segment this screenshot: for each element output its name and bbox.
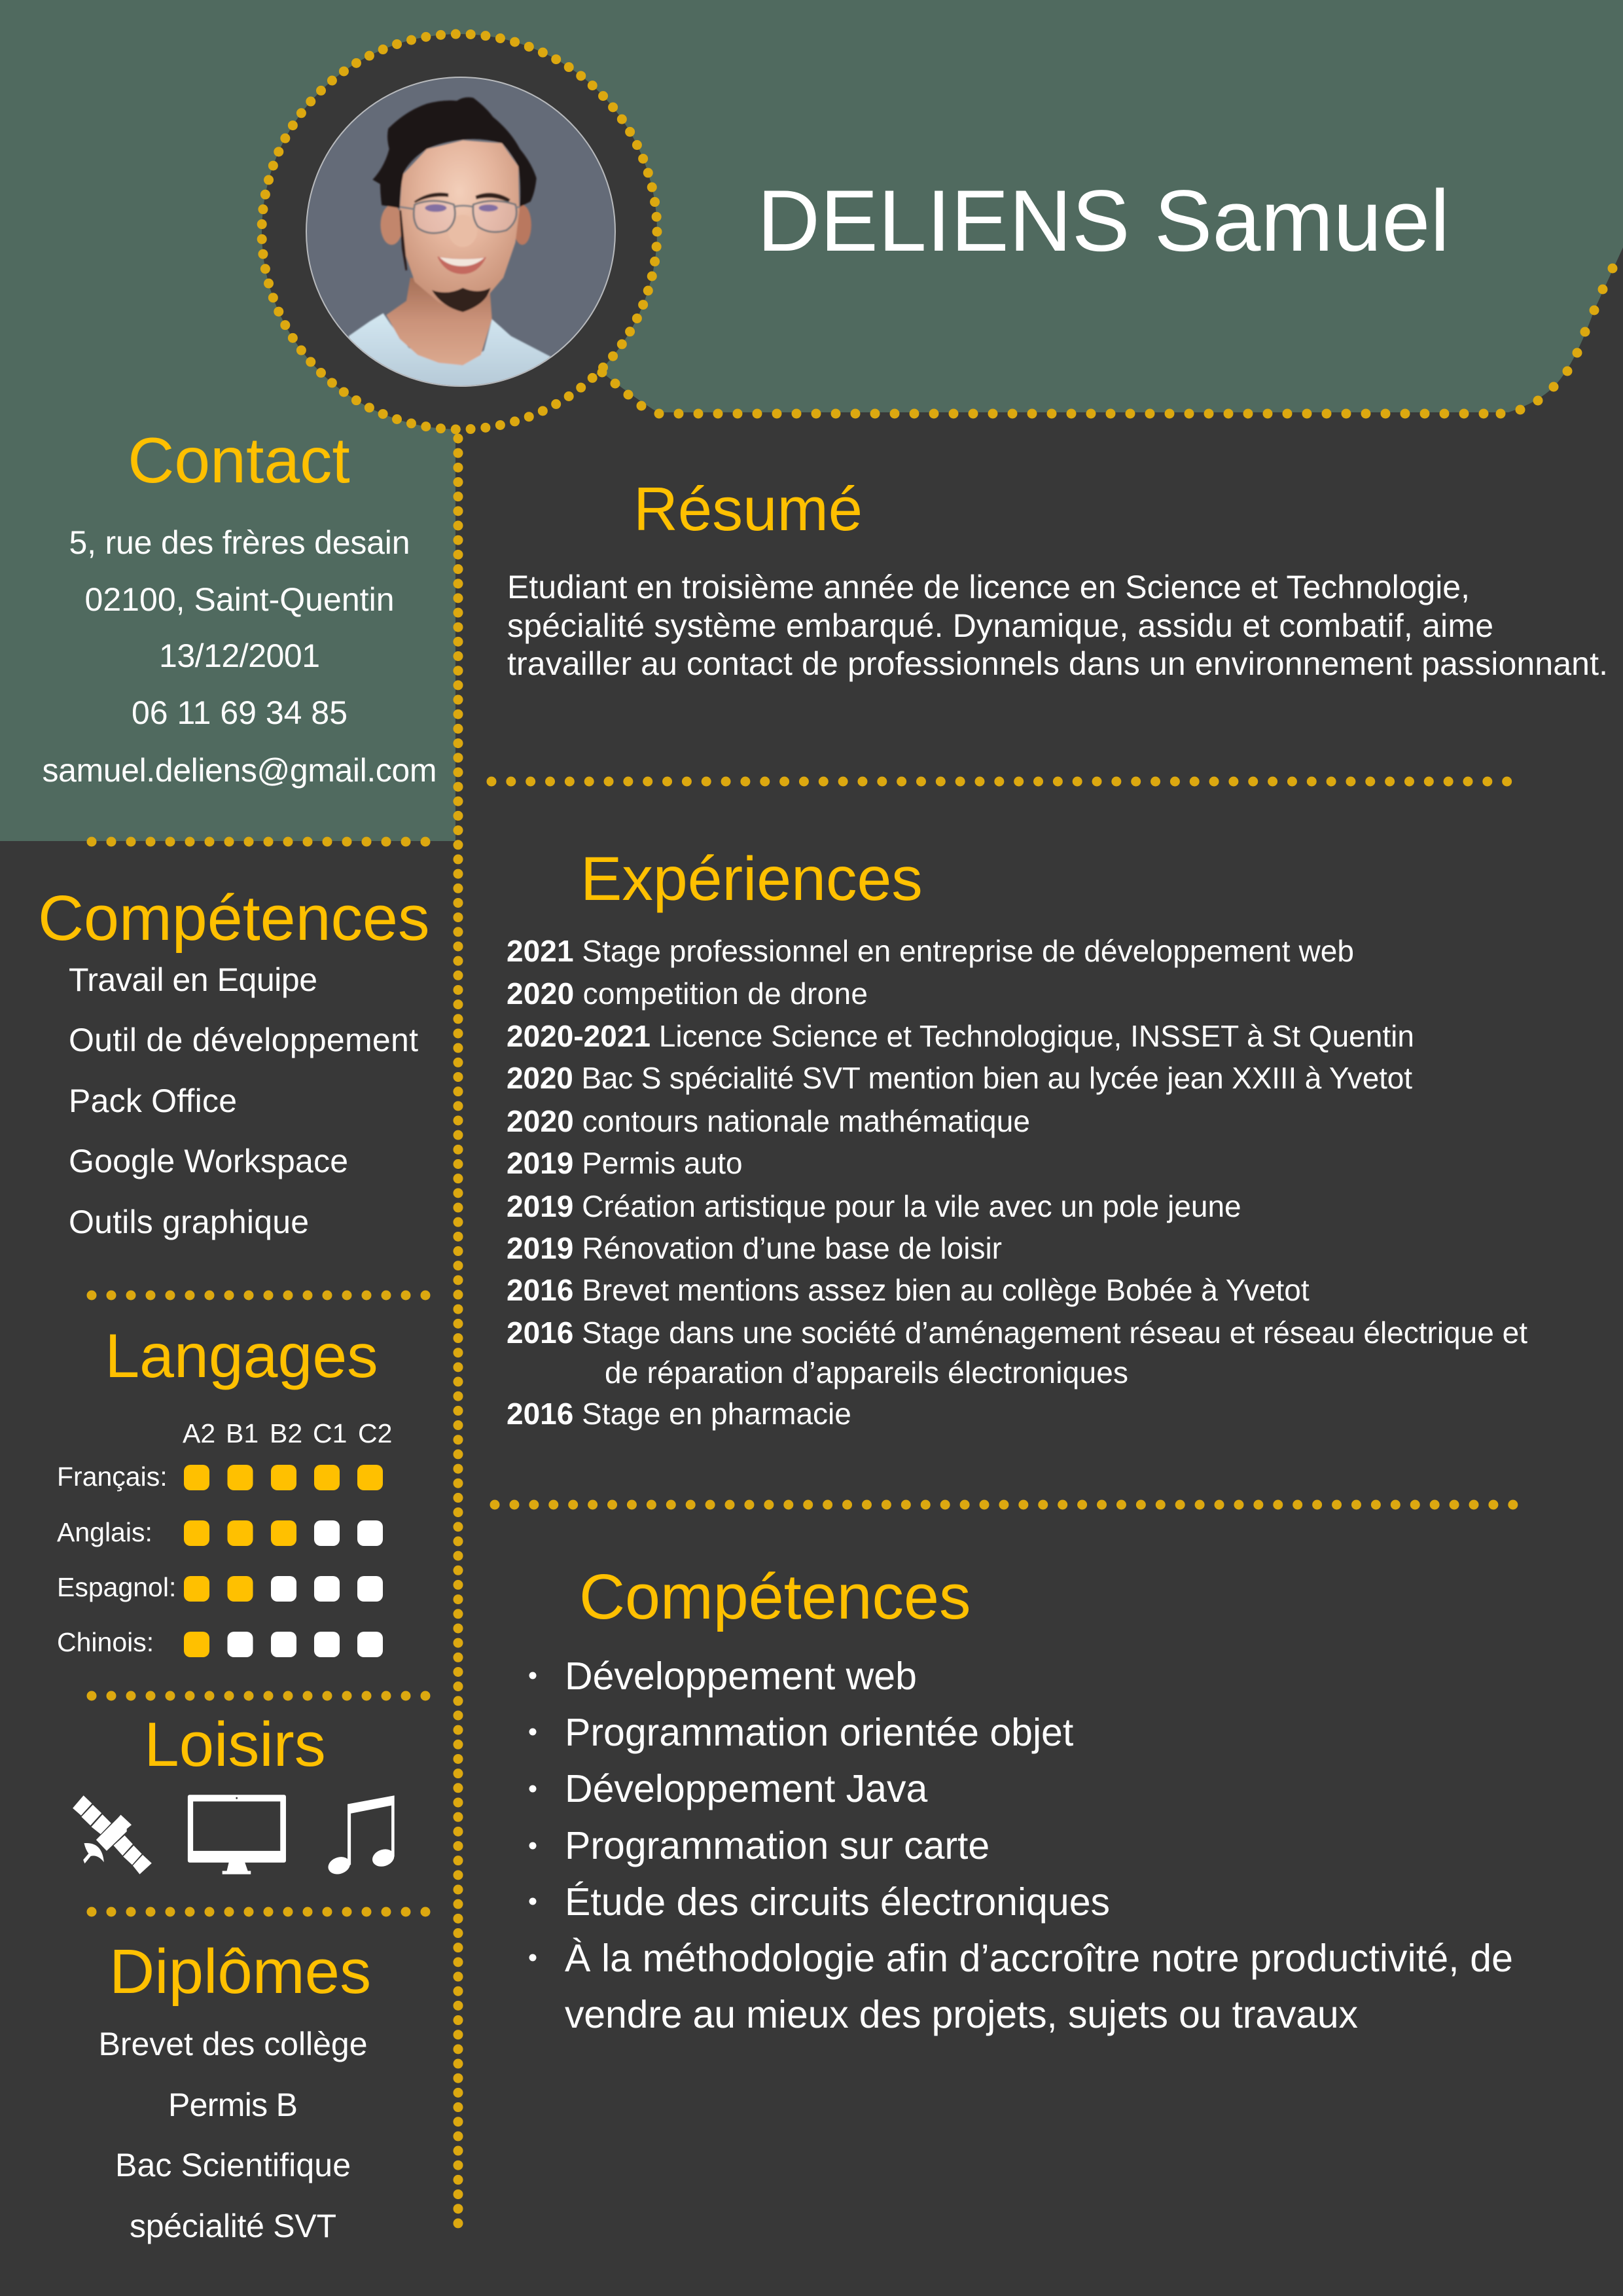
summary text [507,569,1608,682]
skills list: Travail en Equipe [69,961,317,998]
skills list [69,961,418,1240]
level squares [184,1465,383,1657]
heading: loisirs: Loisirs [144,1710,326,1780]
decorative dots [658,408,1484,419]
experience list: 2016 Brevet mentions assez bien au collège Bobée à Yvetot [507,1273,1310,1307]
heading: compétences: Compétences [38,882,429,954]
contact details: samuel.deliens@gmail.com [42,752,437,789]
diplomas list: Brevet des collège [98,2026,368,2062]
level headers: B1 [226,1418,259,1448]
diplomas list: spécialité SVT [130,2208,336,2244]
icon: music note [327,1795,396,1876]
summary text: Etudiant en troisième année de licence en Science et Technologie, [507,569,1470,605]
experience list: 2016 Stage dans une société d’aménagement réseau et réseau électrique et [507,1316,1527,1350]
contact details: 06 11 69 34 85 [132,694,348,731]
portrait photo [306,77,615,391]
diplomas list: Permis B [168,2087,298,2123]
experience list: 2016 Stage en pharmacie [507,1397,851,1431]
contact details [42,524,437,789]
skills list: Outil de développement [69,1022,418,1058]
experience list: 2020 competition de drone [507,977,868,1011]
panel: hobbies [73,1710,396,1876]
diplomas list [98,2026,368,2244]
skills list: À la méthodologie afin d’accroître notre productivité, de [565,1937,1513,1980]
experience list: 2020 Bac S spécialité SVT mention bien au lycée jean XXIII à Yvetot [507,1061,1412,1095]
skills list: Programmation orientée objet [565,1711,1073,1754]
diplomas list: Bac Scientifique [115,2147,351,2183]
heading: compétences: Compétences [579,1561,971,1632]
heading: langages: Langages [105,1321,378,1391]
experience list: 2019 Rénovation d’une base de loisir [507,1231,1002,1265]
experience list: 2019 Permis auto [507,1146,743,1180]
panel: languages [57,1321,392,1657]
heading: expériences: Expériences [580,844,923,914]
icon: satellite [73,1795,152,1874]
heading: contact: Contact [128,424,350,496]
panel: portrait ring [262,34,657,429]
experience list [507,934,1527,1431]
language labels: Français: [57,1462,168,1492]
skills list [565,1655,1513,2036]
contact details: 02100, Saint-Quentin [85,581,394,618]
experience list: 2020-2021 Licence Science et Technologique, INSSET à St Quentin [507,1019,1414,1053]
icon: monitor [188,1795,286,1874]
experience list: 2019 Création artistique pour la vile avec un pole jeune [507,1189,1241,1223]
skills list: Étude des circuits électroniques [565,1880,1110,1924]
level headers [183,1418,392,1448]
language labels: Anglais: [57,1517,152,1547]
skills list: Google Workspace [69,1143,348,1179]
experience list: 2021 Stage professionnel en entreprise de développement web [507,934,1354,968]
skills list: Développement web [565,1655,917,1698]
skills list: Outils graphique [69,1204,309,1240]
skills list: Pack Office [69,1083,237,1119]
heading: résumé: Résumé [633,475,863,543]
bullets [529,1672,537,1961]
level headers: B2 [270,1418,302,1448]
title: DELIENS Samuel [757,173,1450,270]
panel: experience [507,844,1527,1431]
heading: diplômes: Diplômes [109,1937,371,2007]
panel: résumé [507,475,1608,682]
contact details: 13/12/2001 [159,637,320,674]
panel: green header and contact background [0,0,1623,841]
experience list: de réparation d’appareils électroniques [605,1355,1128,1390]
level headers: A2 [183,1418,215,1448]
skills list: Programmation sur carte [565,1824,990,1867]
panel: technical skills [529,1561,1513,2036]
experience list: 2020 contours nationale mathématique [507,1104,1030,1138]
panel: skills [38,882,429,1240]
level headers: C1 [313,1418,347,1448]
language labels: Espagnol: [57,1572,176,1602]
level headers: C2 [358,1418,392,1448]
language labels: Chinois: [57,1627,154,1657]
contact details: 5, rue des frères desain [69,524,410,561]
summary text: travailler au contact de professionnels dans un environnement passionnant. [507,645,1608,682]
skills list: vendre au mieux des projets, sujets ou travaux [565,1993,1358,2036]
language labels [57,1462,176,1657]
summary text: spécialité système embarqué. Dynamique, assidu et combatif, aime [507,607,1493,644]
panel: contact [42,424,437,789]
panel: diplomas [98,1937,371,2244]
skills list: Développement Java [565,1767,927,1810]
